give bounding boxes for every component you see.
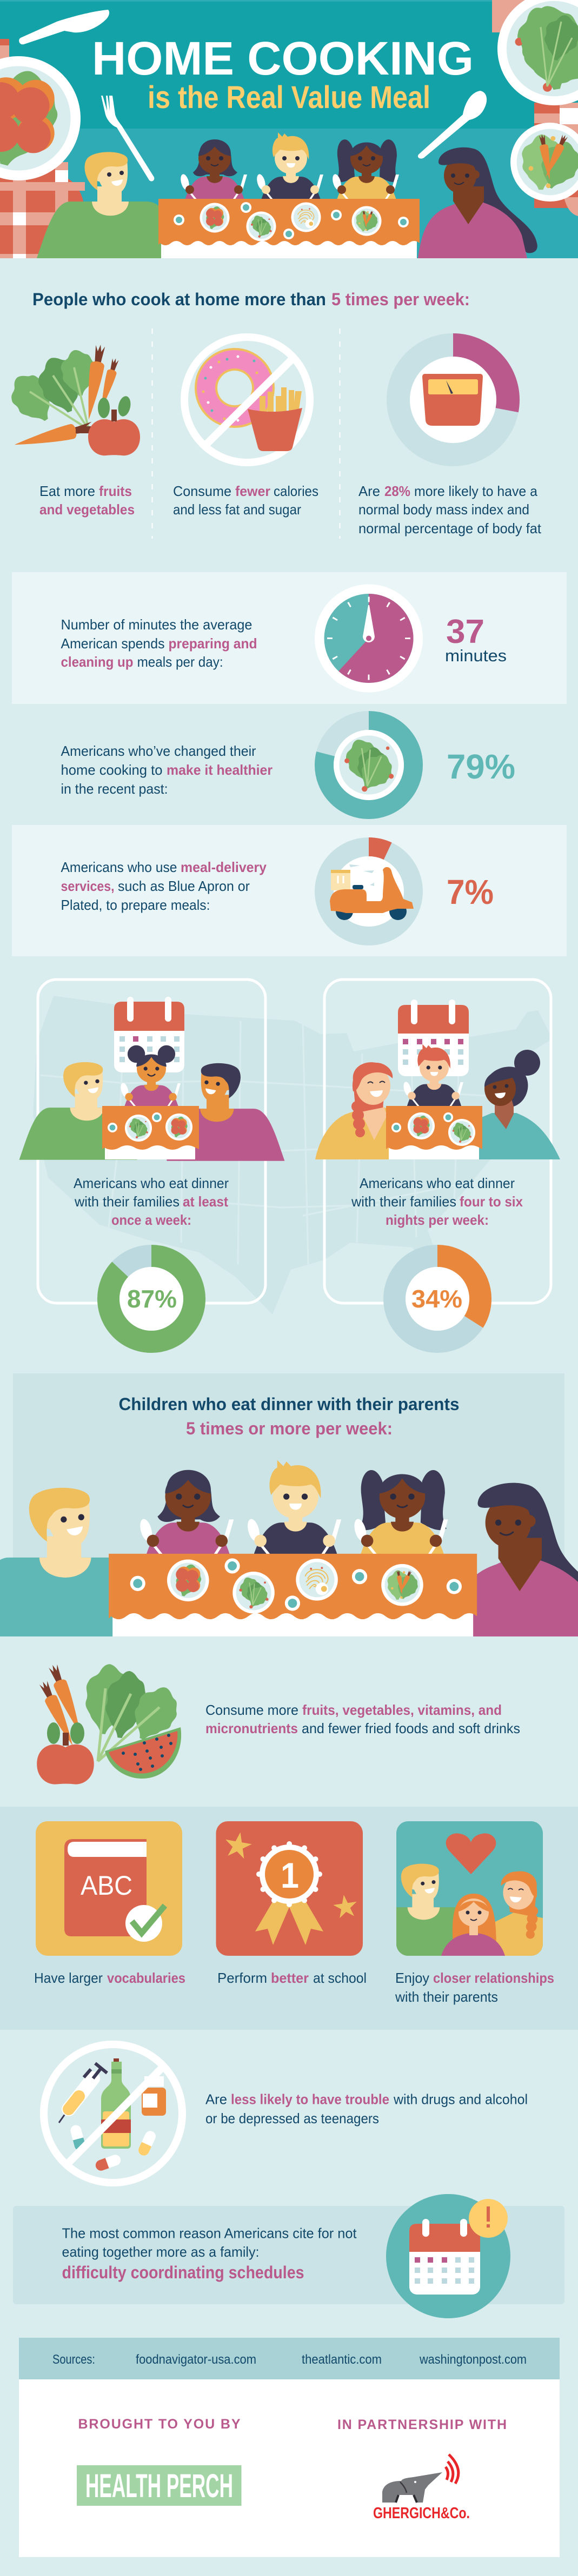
panel: healthier home cooking <box>61 721 515 809</box>
chart: 34% donut <box>395 1256 480 1342</box>
card: school award: 1 <box>281 1855 299 1895</box>
panel: meal delivery <box>12 825 567 956</box>
text: minutes description: preparing and <box>169 635 257 652</box>
heading: children: Children who eat dinner with their parents <box>119 1394 460 1414</box>
header background <box>0 0 578 258</box>
text: fruits and vegetables <box>39 483 135 518</box>
text: delivery description: meal-delivery <box>181 859 267 875</box>
sources bar: theatlantic.com <box>302 2352 382 2367</box>
text: 28% more likely: Are <box>358 483 380 499</box>
icon: no drugs or alcohol <box>44 2044 182 2183</box>
card: closer relationships <box>396 1821 543 1956</box>
icon: vegetables and apple <box>3 344 140 455</box>
text: fruits and vegetables: Eat more <box>39 483 95 499</box>
stat: 79%: 79% <box>447 747 515 786</box>
text: four to six nights: four to six <box>460 1193 523 1210</box>
sources bar: washingtonpost.com <box>419 2352 527 2367</box>
text: less likely: less likely to have trouble <box>231 2091 389 2107</box>
father and second parent <box>19 1062 284 1161</box>
subtitle: is the Real Value Meal <box>148 80 430 115</box>
text: less likely: or be depressed as teenagers <box>205 2110 379 2126</box>
small table two <box>386 1106 482 1159</box>
text: minutes description: Number of minutes the average <box>61 616 252 633</box>
text: at least once a week <box>74 1175 229 1228</box>
card: vocabulary: ABC <box>81 1870 132 1901</box>
dark-haired parent <box>479 1050 560 1159</box>
text: closer relationships: with their parents <box>395 1989 498 2005</box>
bottle <box>101 2058 131 2149</box>
icon: knife <box>19 10 109 44</box>
text: minutes description <box>61 616 257 670</box>
card: school award <box>216 1821 363 1956</box>
text: 28% more likely: 28% <box>384 483 410 499</box>
plate: carrots right <box>510 123 578 202</box>
text: minutes description: meals per day: <box>137 654 223 670</box>
heading: children: 5 times or more per week: <box>186 1419 393 1438</box>
text: less likely <box>205 2091 528 2126</box>
stat: 37 minutes: 37 <box>446 613 484 650</box>
text: at least once a week: with their families <box>74 1193 180 1210</box>
text: healthier description: make it healthier <box>167 762 273 778</box>
text: 28% more likely: normal body mass index and <box>358 501 529 518</box>
card: vocabulary <box>36 1821 182 1956</box>
text: healthier description <box>61 743 273 797</box>
sources bar <box>19 2338 560 2379</box>
text: healthier description: home cooking to <box>61 762 162 778</box>
chart: 79% donut <box>324 721 413 809</box>
text: common reason <box>62 2225 357 2282</box>
text: fewer calories: calories <box>274 483 318 499</box>
text: at least once a week: Americans who eat dinner <box>74 1175 229 1191</box>
logo: Ghergich elephant <box>373 2454 470 2522</box>
heading: people who cook: 5 times per week: <box>331 290 470 309</box>
heading: people who cook: People who cook at home more than <box>32 290 326 309</box>
text: consume more: and fewer fried foods and soft drinks <box>302 1720 520 1736</box>
text: 28% more likely: more likely to have a <box>414 483 538 499</box>
credit: brought to you by: BROUGHT TO YOU BY <box>78 2417 241 2432</box>
sources bar: Sources: <box>52 2352 95 2367</box>
text: four to six nights: with their families <box>351 1193 456 1210</box>
stat: 7%: 7% <box>447 873 494 911</box>
icon: fork <box>101 96 154 181</box>
icon: calendar five days <box>398 999 469 1076</box>
logo: Health Perch: HEALTH PERCH <box>85 2467 233 2504</box>
redhead boy <box>402 1044 463 1114</box>
chart: 87% donut: 87% <box>127 1285 177 1313</box>
icon: no donut or fries <box>184 337 310 462</box>
large family scene <box>0 1460 578 1639</box>
header banner <box>0 0 578 258</box>
chart: 34% donut: 34% <box>411 1285 462 1313</box>
text: common reason: eating together more as a family: <box>62 2244 260 2260</box>
text: minutes description: American spends <box>61 635 164 652</box>
family at table <box>158 132 420 258</box>
text: four to six nights <box>351 1175 523 1228</box>
text: better at school: Perform <box>217 1970 267 1986</box>
pill jar <box>142 2076 166 2116</box>
heading: people who cook <box>32 290 470 309</box>
text: 28% more likely <box>358 483 542 536</box>
sources bar: foodnavigator-usa.com <box>136 2352 256 2367</box>
text: healthier description: Americans who’ve changed their <box>61 743 256 759</box>
panel: three benefits <box>0 1807 578 2030</box>
text: four to six nights: Americans who eat dinner <box>360 1175 515 1191</box>
text: less likely: Are <box>205 2091 227 2107</box>
icon: calendar one day <box>114 997 184 1072</box>
text: minutes description: cleaning up <box>61 654 133 670</box>
icon: calendar alert <box>386 2194 510 2318</box>
icon: vegetables and watermelon <box>37 1662 185 1785</box>
redhead parent <box>315 1062 395 1159</box>
text: delivery description: such as Blue Apron or <box>118 878 250 894</box>
text: closer relationships: Enjoy <box>395 1970 429 1986</box>
icon: delivery scooter <box>330 864 414 920</box>
text: consume more <box>205 1702 520 1736</box>
text: delivery description <box>61 859 267 913</box>
text: 28% more likely: normal percentage of body fat <box>358 520 542 536</box>
text: better at school <box>217 1970 367 1986</box>
text: less likely: with drugs and alcohol <box>393 2091 528 2107</box>
text: at least once a week: at least <box>183 1193 228 1210</box>
chart: 7% donut with scooter <box>324 847 414 936</box>
panel: minutes per day <box>12 572 567 704</box>
map of the United States <box>33 996 553 1314</box>
text: better at school: at school <box>313 1970 367 1986</box>
text: better at school: better <box>271 1970 309 1986</box>
text: consume more: Consume more <box>205 1702 298 1718</box>
logo: Ghergich elephant: GHERGICH&Co. <box>373 2505 470 2522</box>
text: delivery description: Americans who use <box>61 859 177 875</box>
text: fruits and vegetables: fruits <box>99 483 132 499</box>
pills <box>69 2124 157 2172</box>
text: consume more: fruits, vegetables, vitamins, and <box>302 1702 502 1718</box>
text: consume more: micronutrients <box>205 1720 298 1736</box>
father <box>37 152 165 258</box>
credit: in partnership with: IN PARTNERSHIP WITH <box>337 2417 507 2432</box>
stat: 37 minutes: minutes <box>445 646 507 665</box>
chart: 87% donut <box>108 1256 195 1342</box>
heading: children <box>119 1394 460 1438</box>
syringe <box>59 2063 107 2123</box>
stat: 37 minutes <box>445 613 507 665</box>
text: fewer calories: Consume <box>173 483 231 499</box>
text: healthier description: in the recent past: <box>61 781 168 797</box>
checked tablecloth left <box>0 39 85 258</box>
chart: 28% donut with scale <box>398 345 508 455</box>
logo: Health Perch <box>77 2465 241 2506</box>
plate: salad left <box>0 56 81 180</box>
title: HOME COOKING <box>92 32 474 85</box>
text: at least once a week: once a week: <box>111 1212 191 1228</box>
text: vocabularies <box>34 1970 185 1986</box>
text: closer relationships: closer relationships <box>433 1970 554 1986</box>
text: delivery description: Plated, to prepare meals: <box>61 897 210 913</box>
icon: spoon <box>418 91 487 159</box>
panel: common reason <box>13 2194 564 2318</box>
panel: children who eat with parents <box>0 1373 578 1639</box>
text: closer relationships <box>395 1970 554 2005</box>
prohibition ring <box>44 2044 182 2183</box>
panel: at least once a week <box>19 980 284 1342</box>
icon: weighing scale <box>422 374 483 426</box>
small table <box>102 1106 199 1159</box>
text: fruits and vegetables: and vegetables <box>39 501 135 518</box>
text: four to six nights: nights per week: <box>386 1212 489 1228</box>
footer panel <box>19 2379 560 2557</box>
panel: four to six nights <box>315 980 560 1342</box>
checked tablecloth right <box>492 0 578 216</box>
child with buns <box>119 1045 181 1115</box>
mother <box>418 147 537 258</box>
text: fewer calories: fewer <box>235 483 270 499</box>
text: fewer calories: and less fat and sugar <box>173 501 301 518</box>
chart: clock <box>315 585 423 693</box>
text: fewer calories <box>173 483 318 518</box>
text: common reason: difficulty coordinating schedules <box>62 2263 304 2282</box>
text: delivery description: services, <box>61 878 115 894</box>
text: vocabularies: Have larger <box>34 1970 103 1986</box>
text: vocabularies: vocabularies <box>107 1970 185 1986</box>
text: common reason: The most common reason Americans cite for not <box>62 2225 357 2241</box>
plate: greens top right <box>497 0 578 105</box>
